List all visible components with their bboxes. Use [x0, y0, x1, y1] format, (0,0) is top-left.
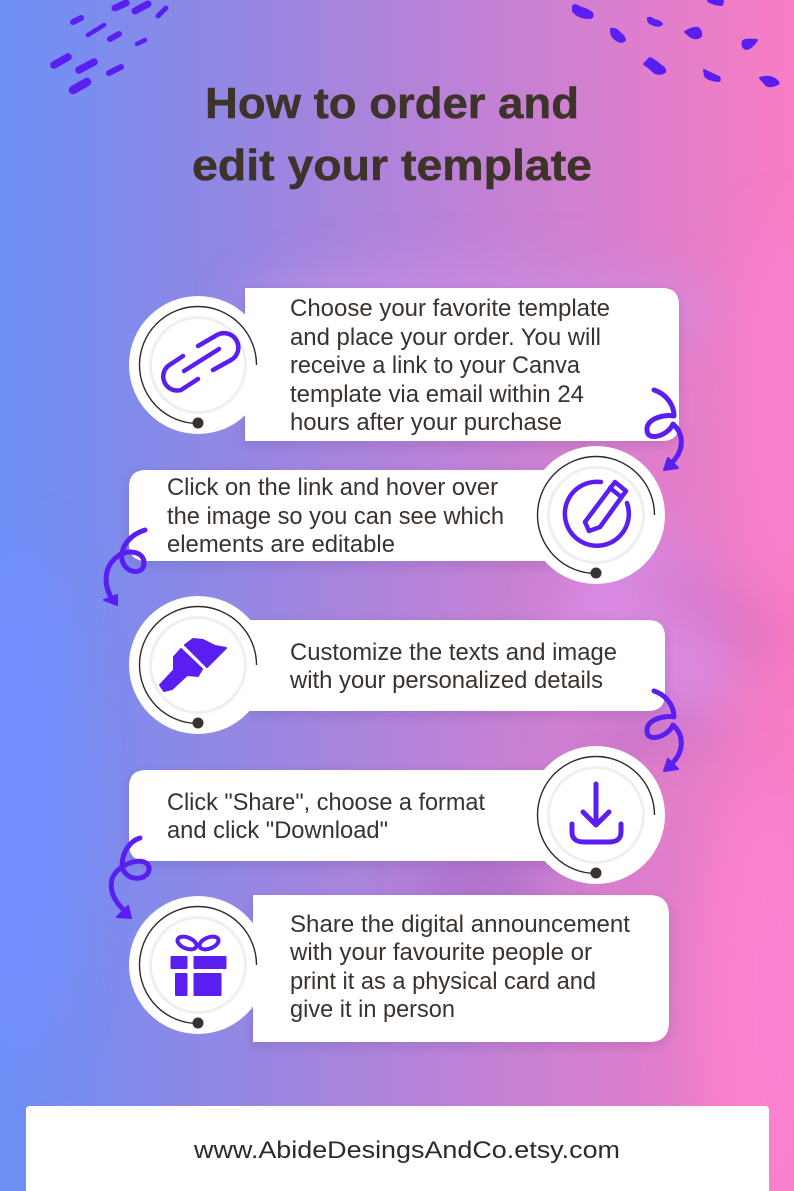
arrow 2 [104, 530, 145, 605]
step 3 icon badge [129, 596, 267, 734]
step 2 icon badge [527, 446, 665, 584]
step 5 text [289, 911, 630, 1023]
step 1 text: Choose your favorite template [290, 295, 610, 322]
step 4 text [167, 789, 485, 844]
step 1 text: receive a link to your Canva [290, 352, 581, 379]
icon: gift [170, 934, 226, 996]
footer bar [26, 1106, 769, 1191]
step 1 icon badge [129, 296, 267, 434]
step 1 text: template via email within 24 [290, 381, 584, 408]
step 5 text: give it in person [290, 996, 455, 1023]
step 2 text: Click on the link and hover over [167, 474, 498, 501]
icon: edit pencil [565, 482, 629, 546]
step 4 text: and click "Download" [167, 817, 388, 844]
step 1 panel [245, 288, 679, 441]
decorative blobs top right [573, 1, 779, 86]
step 4 icon badge [527, 746, 665, 884]
footer url: www.AbideDesingsAndCo.etsy.com [193, 1137, 620, 1164]
title: edit your template [192, 141, 592, 190]
icon: link [163, 333, 238, 391]
decorative dashes top left [54, 3, 166, 90]
title [192, 79, 592, 190]
icon: download [572, 784, 621, 842]
step 2 text: the image so you can see which [167, 503, 504, 530]
arrow 4 [111, 838, 149, 918]
step 2 panel [129, 470, 560, 561]
step 5 icon badge [129, 896, 267, 1034]
step 4 panel [129, 770, 560, 861]
step 3 text [289, 639, 617, 694]
arrow 1 [647, 390, 681, 470]
step 3 text: with your personalized details [289, 667, 603, 694]
step 4 text: Click "Share", choose a format [167, 789, 485, 816]
title: How to order and [205, 79, 579, 128]
step 1 text: hours after your purchase [290, 409, 562, 436]
step 5 text: with your favourite people or [289, 939, 592, 966]
step 2 text [167, 474, 504, 558]
step 3 text: Customize the texts and image [290, 639, 617, 666]
step 1 text: and place your order. You will [290, 324, 601, 351]
step 3 panel [250, 620, 665, 711]
arrow 3 [647, 691, 681, 771]
step 5 text: print it as a physical card and [290, 968, 596, 995]
icon: paint brush [160, 639, 226, 691]
step 1 text [290, 295, 610, 436]
step 5 text: Share the digital announcement [290, 911, 630, 938]
step 2 text: elements are editable [167, 531, 395, 558]
step 5 panel [253, 895, 669, 1042]
